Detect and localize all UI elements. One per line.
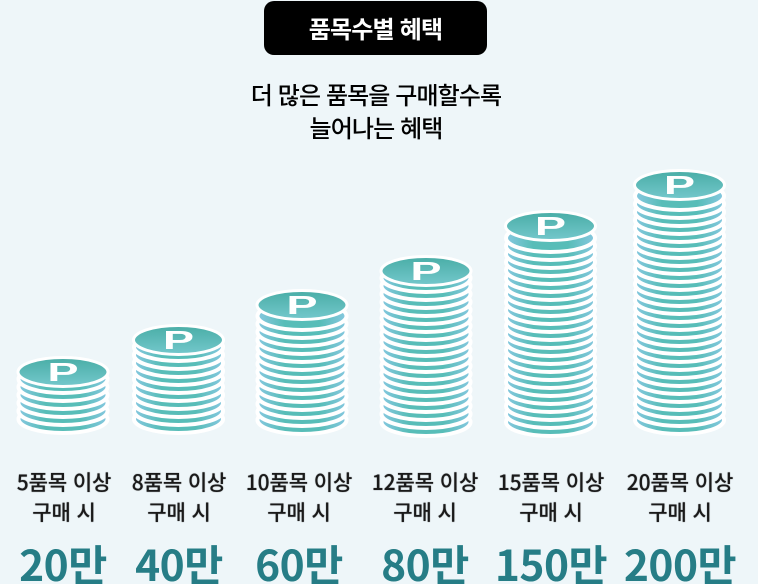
subtitle: 늘어나는 혜택: [310, 109, 442, 144]
label: 15 items: 구매 시: [519, 497, 583, 527]
label: 15 items: 15품목 이상: [498, 467, 604, 497]
coin stack: 10 items: P: [286, 291, 318, 320]
subtitle: [251, 76, 501, 144]
coin stack: 8 items: [134, 326, 224, 433]
label: 10 items: 구매 시: [267, 497, 331, 527]
label: 12 items: 구매 시: [393, 497, 457, 527]
label: 8 items: 구매 시: [147, 497, 211, 527]
label: 20 items: 구매 시: [648, 497, 712, 527]
label: 20 items: 20품목 이상: [627, 467, 733, 497]
coin stack: 10 items: [257, 290, 347, 434]
label: 8 items: [132, 467, 226, 527]
title badge: 품목수별 혜택: [309, 10, 442, 45]
label: 12 items: 12품목 이상: [372, 467, 478, 497]
coin stack: 5 items: P: [47, 358, 79, 387]
coin stack: 20 items: [634, 170, 724, 434]
label: 5 items: 구매 시: [32, 497, 96, 527]
coin stack: 12 items: P: [410, 257, 442, 286]
coin stack: 20 items: P: [664, 171, 695, 200]
coin stack: 15 items: P: [535, 212, 566, 241]
coin stack: 8 items: P: [163, 326, 194, 355]
label: 15 items: [498, 467, 604, 527]
label: 10 items: [246, 467, 352, 527]
coin stack: 5 items: [18, 358, 108, 433]
label: 20 items: [627, 467, 734, 527]
coin stack: 15 items: [506, 212, 596, 436]
label: 12 items: [372, 467, 478, 527]
label: 5 items: [17, 467, 112, 527]
label: 5 items: 5품목 이상: [17, 467, 111, 497]
subtitle: 더 많은 품목을 구매할수록: [251, 76, 501, 111]
coin stack: 12 items: [381, 256, 471, 436]
label: 10 items: 10품목 이상: [246, 467, 352, 497]
title badge: [264, 1, 487, 55]
label: 8 items: 8품목 이상: [132, 467, 226, 497]
